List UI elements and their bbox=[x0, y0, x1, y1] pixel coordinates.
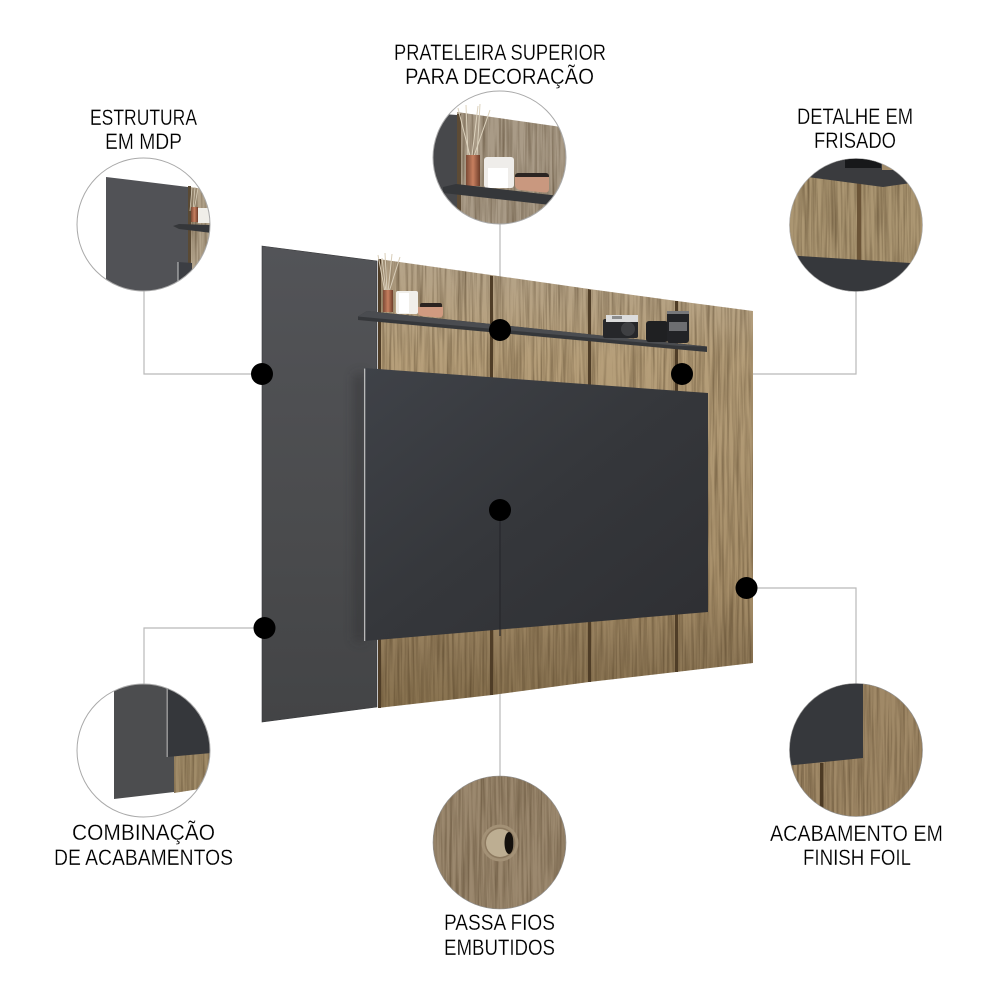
heading bbox=[394, 40, 606, 89]
heading: EM MDP bbox=[105, 129, 182, 154]
icon: cable grommet bbox=[482, 824, 518, 862]
leader lines bbox=[144, 224, 856, 776]
heading bbox=[90, 105, 197, 154]
callout: detalhe em frisado bbox=[785, 104, 925, 295]
vertical grooves bbox=[378, 259, 678, 708]
callout: acabamento em finish foil bbox=[770, 683, 943, 870]
hotspot dots bbox=[251, 319, 758, 639]
graphite side panel bbox=[262, 246, 377, 722]
detail circle bbox=[106, 177, 210, 290]
heading: ACABAMENTO EM bbox=[770, 821, 943, 846]
heading: FRISADO bbox=[814, 128, 896, 153]
detail circle bbox=[434, 104, 566, 224]
decor: camera bbox=[603, 315, 638, 338]
callout: passa fios embutidos bbox=[433, 776, 567, 960]
detail circle bbox=[785, 683, 923, 819]
decor: lenses bbox=[646, 311, 689, 343]
heading bbox=[797, 104, 913, 153]
heading bbox=[54, 820, 233, 870]
heading: PARA DECORAÇÃO bbox=[405, 64, 594, 89]
heading: ESTRUTURA bbox=[90, 105, 197, 130]
heading: FINISH FOIL bbox=[803, 845, 911, 870]
heading: DETALHE EM bbox=[797, 104, 913, 129]
decor: bowl bbox=[418, 303, 443, 318]
heading: DE ACABAMENTOS bbox=[54, 845, 233, 870]
heading: COMBINAÇÃO bbox=[72, 820, 215, 845]
heading: EMBUTIDOS bbox=[444, 935, 555, 960]
shelf bbox=[358, 311, 707, 352]
decor: diffuser with reeds bbox=[378, 253, 400, 312]
callout: combinação de acabamentos bbox=[54, 684, 233, 870]
TV panel furniture bbox=[262, 246, 753, 722]
TV shadow bbox=[354, 372, 364, 643]
callout: prateleira superior bbox=[394, 40, 606, 225]
cable line over board bbox=[499, 510, 501, 636]
TV mount board bbox=[364, 368, 708, 641]
decor: candle bbox=[396, 291, 418, 314]
heading bbox=[770, 821, 943, 870]
wood back panel bbox=[378, 259, 753, 708]
detail circle bbox=[785, 157, 925, 295]
detail circle bbox=[114, 684, 210, 799]
TV board light edge bbox=[364, 368, 366, 641]
heading: PASSA FIOS bbox=[444, 910, 555, 935]
heading: PRATELEIRA SUPERIOR bbox=[394, 40, 606, 65]
detail circle bbox=[433, 776, 567, 910]
callout: estrutura em MDP bbox=[77, 105, 215, 292]
heading bbox=[444, 910, 555, 960]
